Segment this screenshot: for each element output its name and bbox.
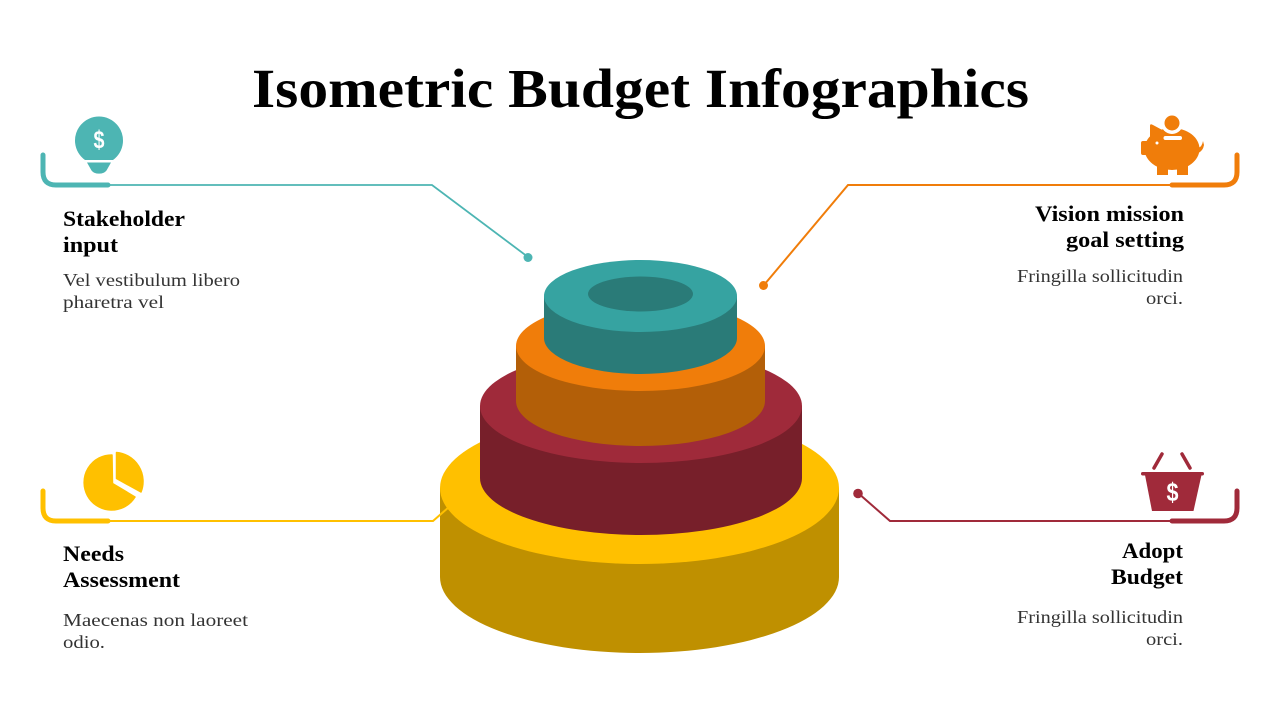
body text: odio. [63, 632, 105, 652]
body text: orci. [1146, 288, 1183, 308]
stacked cylinder chart [110, 260, 839, 653]
panel: adopt budget [853, 454, 1237, 649]
icon: light bulb with dollar: $ [94, 126, 105, 154]
bracket and connector: orange [759, 155, 1237, 290]
bracket and connector: maroon [853, 489, 1237, 521]
heading: Assessment [63, 567, 181, 592]
bracket: yellow [43, 491, 108, 521]
body text [1017, 266, 1183, 308]
icon: piggy bank [1141, 112, 1204, 175]
body text: Fringilla sollicitudin [1017, 266, 1183, 286]
connector: needs assessment line [110, 507, 449, 521]
panel: vision mission goal setting [759, 112, 1237, 308]
body text [63, 270, 240, 312]
tier: teal top ring [544, 260, 737, 374]
heading: Needs [63, 541, 124, 566]
heading [1035, 201, 1184, 252]
heading [63, 541, 181, 592]
heading: Budget [1111, 564, 1184, 589]
body text: orci. [1146, 629, 1183, 649]
icon: light bulb with dollar [75, 117, 123, 174]
bracket and connector: teal [43, 155, 532, 262]
heading [1111, 538, 1184, 589]
tier: maroon [480, 349, 802, 535]
icon: pie chart [84, 452, 143, 510]
body text [1017, 607, 1183, 649]
icon: shopping basket with dollar [1141, 454, 1204, 511]
heading: Stakeholder [63, 206, 185, 231]
body text: pharetra vel [63, 292, 164, 312]
tier: yellow base [440, 412, 839, 653]
tier: orange [516, 301, 765, 446]
panel: stakeholder input [43, 117, 532, 312]
heading: input [63, 232, 119, 257]
heading [63, 206, 185, 257]
heading: Vision mission [1035, 201, 1184, 226]
body text: Vel vestibulum libero [63, 270, 240, 290]
body text [63, 610, 248, 652]
title: Isometric Budget Infographics [252, 58, 1029, 119]
panel: needs assessment [43, 452, 248, 652]
body text: Maecenas non laoreet [63, 610, 248, 630]
body text: Fringilla sollicitudin [1017, 607, 1183, 627]
heading: goal setting [1066, 227, 1184, 252]
heading: Adopt [1122, 538, 1184, 563]
icon: shopping basket with dollar: $ [1166, 477, 1179, 507]
